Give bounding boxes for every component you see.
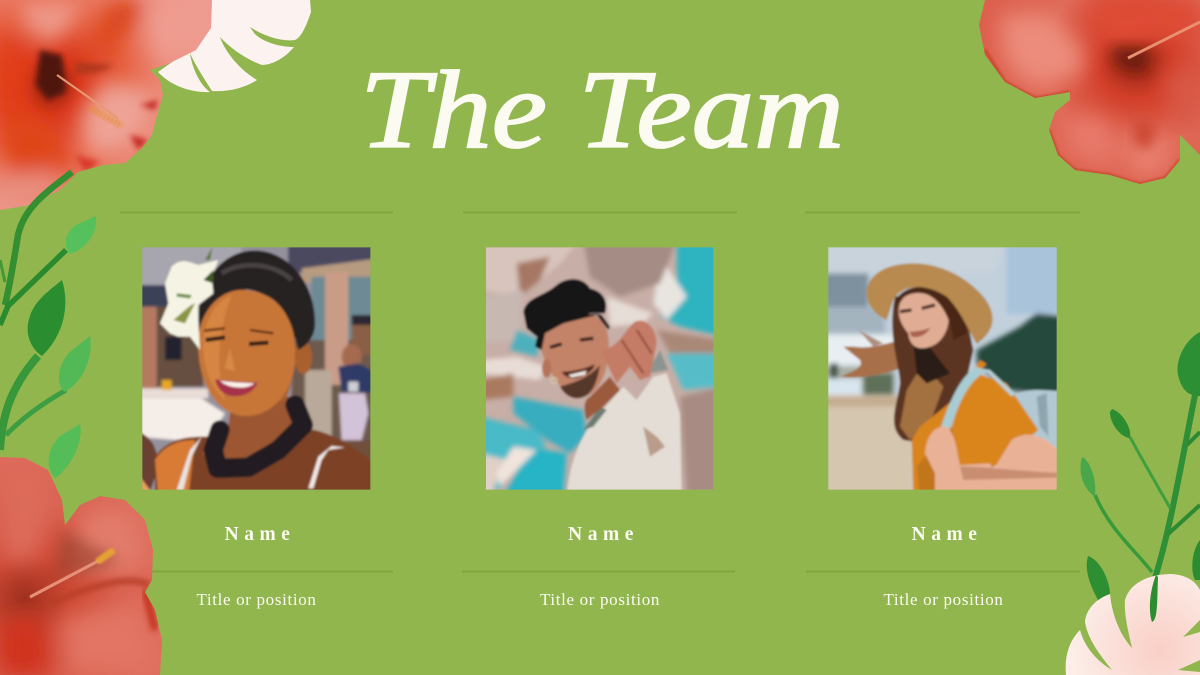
icon: bottom-left hibiscus flower xyxy=(0,450,170,675)
column 3: team member xyxy=(805,212,1080,609)
name label: Name xyxy=(225,524,295,545)
photo: man with curly hair pointing xyxy=(486,247,714,490)
position label: Title or position xyxy=(196,590,316,609)
photo: woman in straw hat with backpack xyxy=(828,247,1057,490)
stems: right plant xyxy=(1080,332,1200,600)
icon: top-left hibiscus flower xyxy=(0,0,215,215)
leaf: bottom-right monstera xyxy=(1066,574,1200,675)
leaves xyxy=(1080,332,1200,600)
position label: Title or position xyxy=(884,590,1004,609)
stems: left climbing plant xyxy=(0,172,96,478)
leaves xyxy=(28,216,96,478)
necklace xyxy=(213,405,303,468)
position label: Title or position xyxy=(540,590,660,609)
photo: woman with white flower and black necklace xyxy=(142,247,370,490)
name label: Name xyxy=(568,524,639,545)
column 2: team member xyxy=(462,212,737,609)
leaf: top-left monstera xyxy=(158,0,311,92)
title: The Team xyxy=(360,48,844,172)
column 1: team member xyxy=(120,212,393,609)
icon: top-right hibiscus flower xyxy=(975,0,1200,190)
name label: Name xyxy=(912,524,982,545)
